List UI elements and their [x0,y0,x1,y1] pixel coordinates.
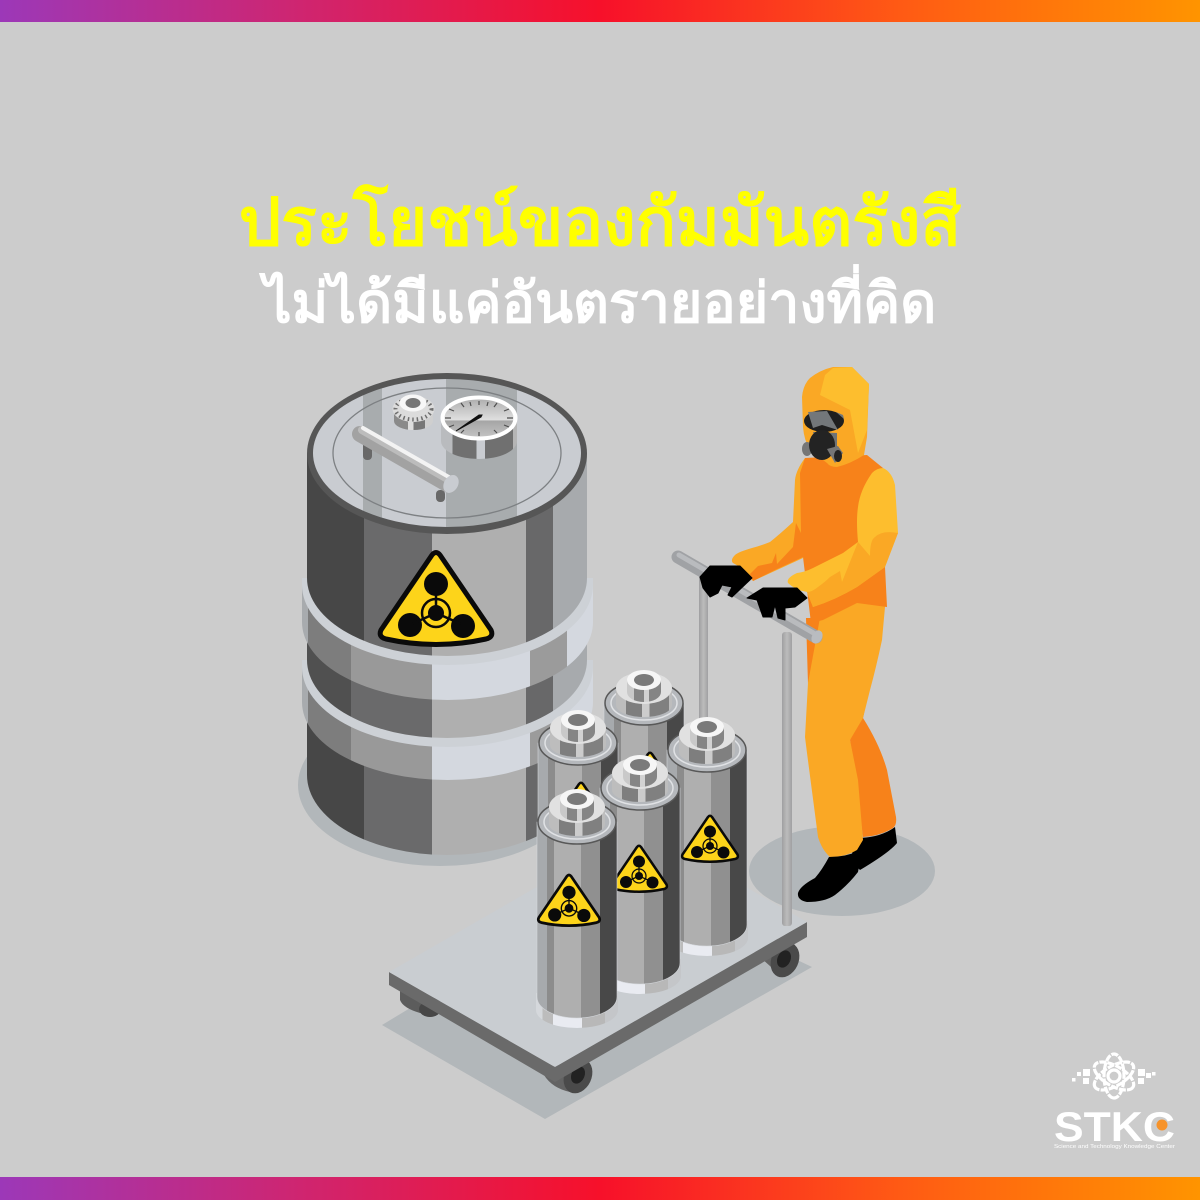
drum lower ring [302,667,593,780]
title line 1: ประโยชน์ของกัมมันตรังสี [239,183,961,260]
front leg [805,596,886,857]
icon: atom [1090,1054,1138,1098]
cylinder front [536,789,618,1028]
worker in hazmat suit [678,367,898,902]
torso [750,455,887,623]
lid handle [360,428,462,502]
cylinder back left [537,710,619,949]
far arm [732,458,805,581]
drum middle body [307,600,587,738]
top gradient bar [0,0,1200,22]
cart [389,827,807,1098]
near arm [788,468,898,607]
goggles [804,410,844,432]
radioactive drum [302,373,593,855]
gas mask [802,430,843,463]
bottom gradient bar [0,1177,1200,1200]
left handle post [699,575,708,740]
drum upper ring [302,582,593,700]
logo tagline: Science and Technology Knowledge Center [1054,1144,1175,1150]
title line 2: ไม่ได้มีแค่อันตรายอย่างที่คิด [259,264,936,334]
right glove [747,588,807,620]
logo orange dot [1156,1120,1168,1130]
hood [802,367,869,467]
hood highlight [820,367,869,453]
rear left wheel [400,985,441,1017]
title [239,183,961,334]
person shadow [749,826,935,916]
cart handle bar [678,555,825,646]
back leg [850,675,896,837]
drum upper body [307,453,587,656]
cylinder middle [599,755,681,994]
gas cylinders [536,670,748,1028]
near forearm shade [807,532,898,607]
cart shadow [382,900,812,1119]
cart deck side right [555,922,807,1082]
drum lower body [307,680,587,855]
drum lid rim [307,373,587,534]
rear right wheel [752,935,805,982]
cart deck top [389,827,807,1067]
cylinder back [603,670,685,909]
icon: hazard label on drum [380,552,492,644]
front shoe [798,850,862,902]
cylinder right [666,717,748,956]
icon: lid valve [392,394,434,430]
logo wordmark: STKC [1054,1103,1175,1150]
STKC logo [1054,1054,1175,1150]
left glove [700,566,752,597]
right handle post [782,632,792,926]
icon: pressure gauge [441,398,517,459]
drum lid [313,379,581,527]
icon: pixel squares [1072,1069,1156,1084]
front wheel [544,1054,598,1098]
drum shadow [298,704,582,866]
cart deck side left [389,972,555,1082]
waist sliver [806,618,824,684]
back shoe [850,827,897,870]
